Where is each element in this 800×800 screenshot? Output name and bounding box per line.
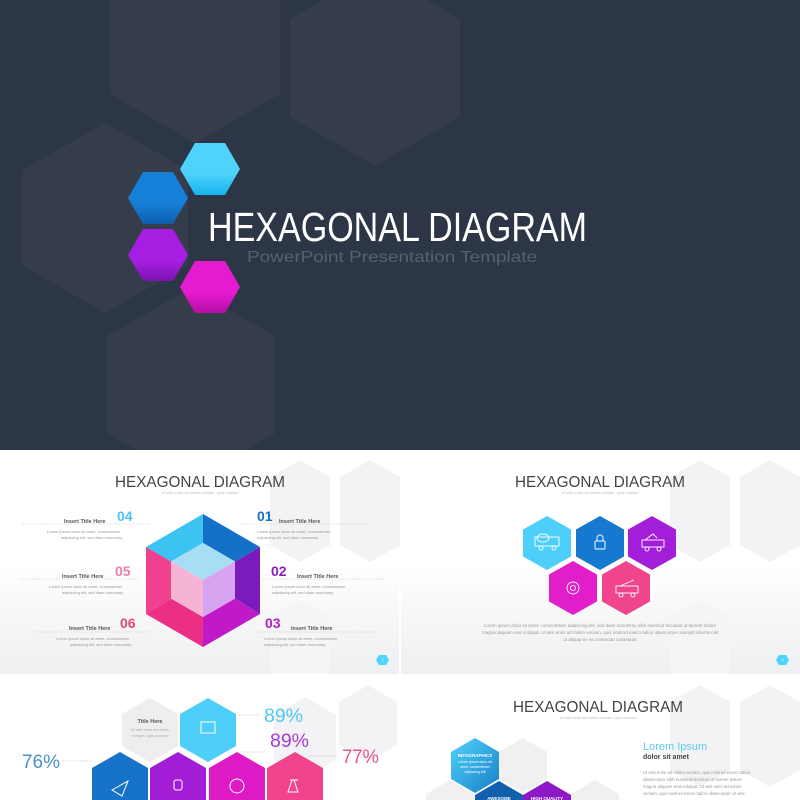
callout 04: adipiscing elit, sed diam nonummy. xyxy=(61,535,123,540)
heading: HEXAGONAL DIAGRAM xyxy=(513,699,683,716)
callout 06: Insert Title Here xyxy=(69,626,110,632)
panel: icon hexagons slide: Ut wisi enim ad minim veniam, quis nostrud xyxy=(562,490,638,495)
heading: HEXAGONAL DIAGRAM xyxy=(115,474,285,491)
callout 02: adipiscing elit, sed diam nonummy. xyxy=(272,590,334,595)
callout 02: Insert Title Here xyxy=(297,574,338,580)
panel: icon hexagons slide: magna aliquam erat volutpat. Ut wisi enim ad minim veniam, quis nostrud exerci tation ullamcorper suscipit lobortis nisl xyxy=(482,630,718,635)
page badge: 3 xyxy=(781,658,784,662)
callout 04 xyxy=(22,508,150,540)
callout 06: adipiscing elit, sed diam nonummy. xyxy=(70,642,132,647)
page badge xyxy=(376,655,389,665)
chart: feature hexagons: INFOGRAPHICS xyxy=(458,753,492,758)
callout 02 xyxy=(262,563,384,595)
chart: hexagon percentages: veniam, quis nostrud xyxy=(132,733,168,738)
chart: hexagon percentages xyxy=(22,698,379,800)
chart: hexagon percentages: Ut wisi enim ad minim xyxy=(131,727,170,732)
callout 03 xyxy=(255,615,378,647)
chart: feature hexagons: Lorem ipsum dolor sit xyxy=(458,760,492,764)
heading: HEXAGONAL DIAGRAM xyxy=(515,474,685,491)
callout 01: Insert Title Here xyxy=(279,519,320,525)
text block: lorem ipsum: veniam, quis nostrud exerci tation ullamcorper Ut wisi xyxy=(643,791,745,796)
panel: percentage hexagons slide xyxy=(0,676,399,800)
callout 03: Insert Title Here xyxy=(291,626,332,632)
text block: lorem ipsum: Ut wisi enim ad minim veniam, quis nostrud exerci tation xyxy=(643,770,751,775)
panel: cube diagram slide xyxy=(0,450,400,674)
chart: feature hexagons xyxy=(426,738,619,800)
callout 06: 06 xyxy=(120,615,136,631)
callout 06 xyxy=(34,615,150,647)
chart: hexagon percentages: 89% xyxy=(270,731,309,752)
callout 04: Lorem ipsum dolor sit amet, consectetuer xyxy=(47,529,121,534)
icon grid xyxy=(523,516,676,615)
text block: lorem ipsum: Lorem Ipsum xyxy=(643,741,707,753)
subtitle: PowerPoint Presentation Template xyxy=(247,249,537,266)
chart: feature hexagons: adipiscing elit xyxy=(464,770,486,774)
text block: lorem ipsum: dolor sit amet xyxy=(643,754,690,761)
icon: colored hexagon cluster xyxy=(128,143,240,313)
text block: Lorem ipsum dolor sit amet, consectetuer adipiscing elit, sed diam nonummy nibh euismod tincidunt ut laoreet dolore xyxy=(484,623,717,628)
callout 06: Lorem ipsum dolor sit amet, consectetuer xyxy=(56,636,130,641)
callout 05 xyxy=(20,563,140,595)
chart: hexagon percentages: 76% xyxy=(22,752,60,773)
panel: features slide xyxy=(401,676,800,800)
panel: icon hexagons slide: ut aliquip ex ea commodo consequat xyxy=(563,637,637,642)
text block: lorem ipsum: ullamcorper nibh euismod tincidunt ut laoreet dolore xyxy=(643,777,742,782)
callout 05: Lorem ipsum dolor sit amet, consectetuer xyxy=(49,584,123,589)
chart: hexagon percentages: 89% xyxy=(264,706,303,727)
chart: hexagon percentages: 77% xyxy=(342,747,379,768)
chart: hexagon percentages: Title Here xyxy=(138,719,162,725)
callout 04: 04 xyxy=(117,508,133,524)
chart: 3D hexagon cube xyxy=(146,514,260,647)
panel: cube diagram slide: Ut wisi enim ad minim veniam, quis nostrud xyxy=(162,490,238,495)
callout 02: 02 xyxy=(271,563,287,579)
callout 03: adipiscing elit, sed diam nonummy. xyxy=(264,642,326,647)
callout 01: 01 xyxy=(257,508,273,524)
text block: lorem ipsum xyxy=(643,741,751,796)
callout 01 xyxy=(240,508,367,540)
callout 03: 03 xyxy=(265,615,281,631)
callout 04: Insert Title Here xyxy=(64,519,105,525)
callout 05: Insert Title Here xyxy=(62,574,103,580)
panel: features slide: Ut wisi enim ad minim veniam, quis nostrud xyxy=(560,715,636,720)
panel: cover slide xyxy=(0,0,800,482)
page badge xyxy=(776,655,789,665)
callout 05: 05 xyxy=(115,563,131,579)
page badge: 2 xyxy=(381,658,384,662)
title: HEXAGONAL DIAGRAM xyxy=(208,204,587,250)
chart: feature hexagons: amet, consectetuer xyxy=(460,765,491,769)
callout 05: adipiscing elit, sed diam nonummy. xyxy=(62,590,124,595)
callout 02: Lorem ipsum dolor sit amet, consectetuer xyxy=(272,584,346,589)
text block: lorem ipsum: magna aliquam erat volutpat. Ut wisi enim ad minim xyxy=(643,784,742,789)
callout 01: adipiscing elit, sed diam nonummy. xyxy=(257,535,319,540)
panel: icon hexagons slide xyxy=(401,450,800,674)
callout 01: Lorem ipsum dolor sit amet, consectetuer xyxy=(257,529,331,534)
callout 03: Lorem ipsum dolor sit amet, consectetuer xyxy=(264,636,338,641)
